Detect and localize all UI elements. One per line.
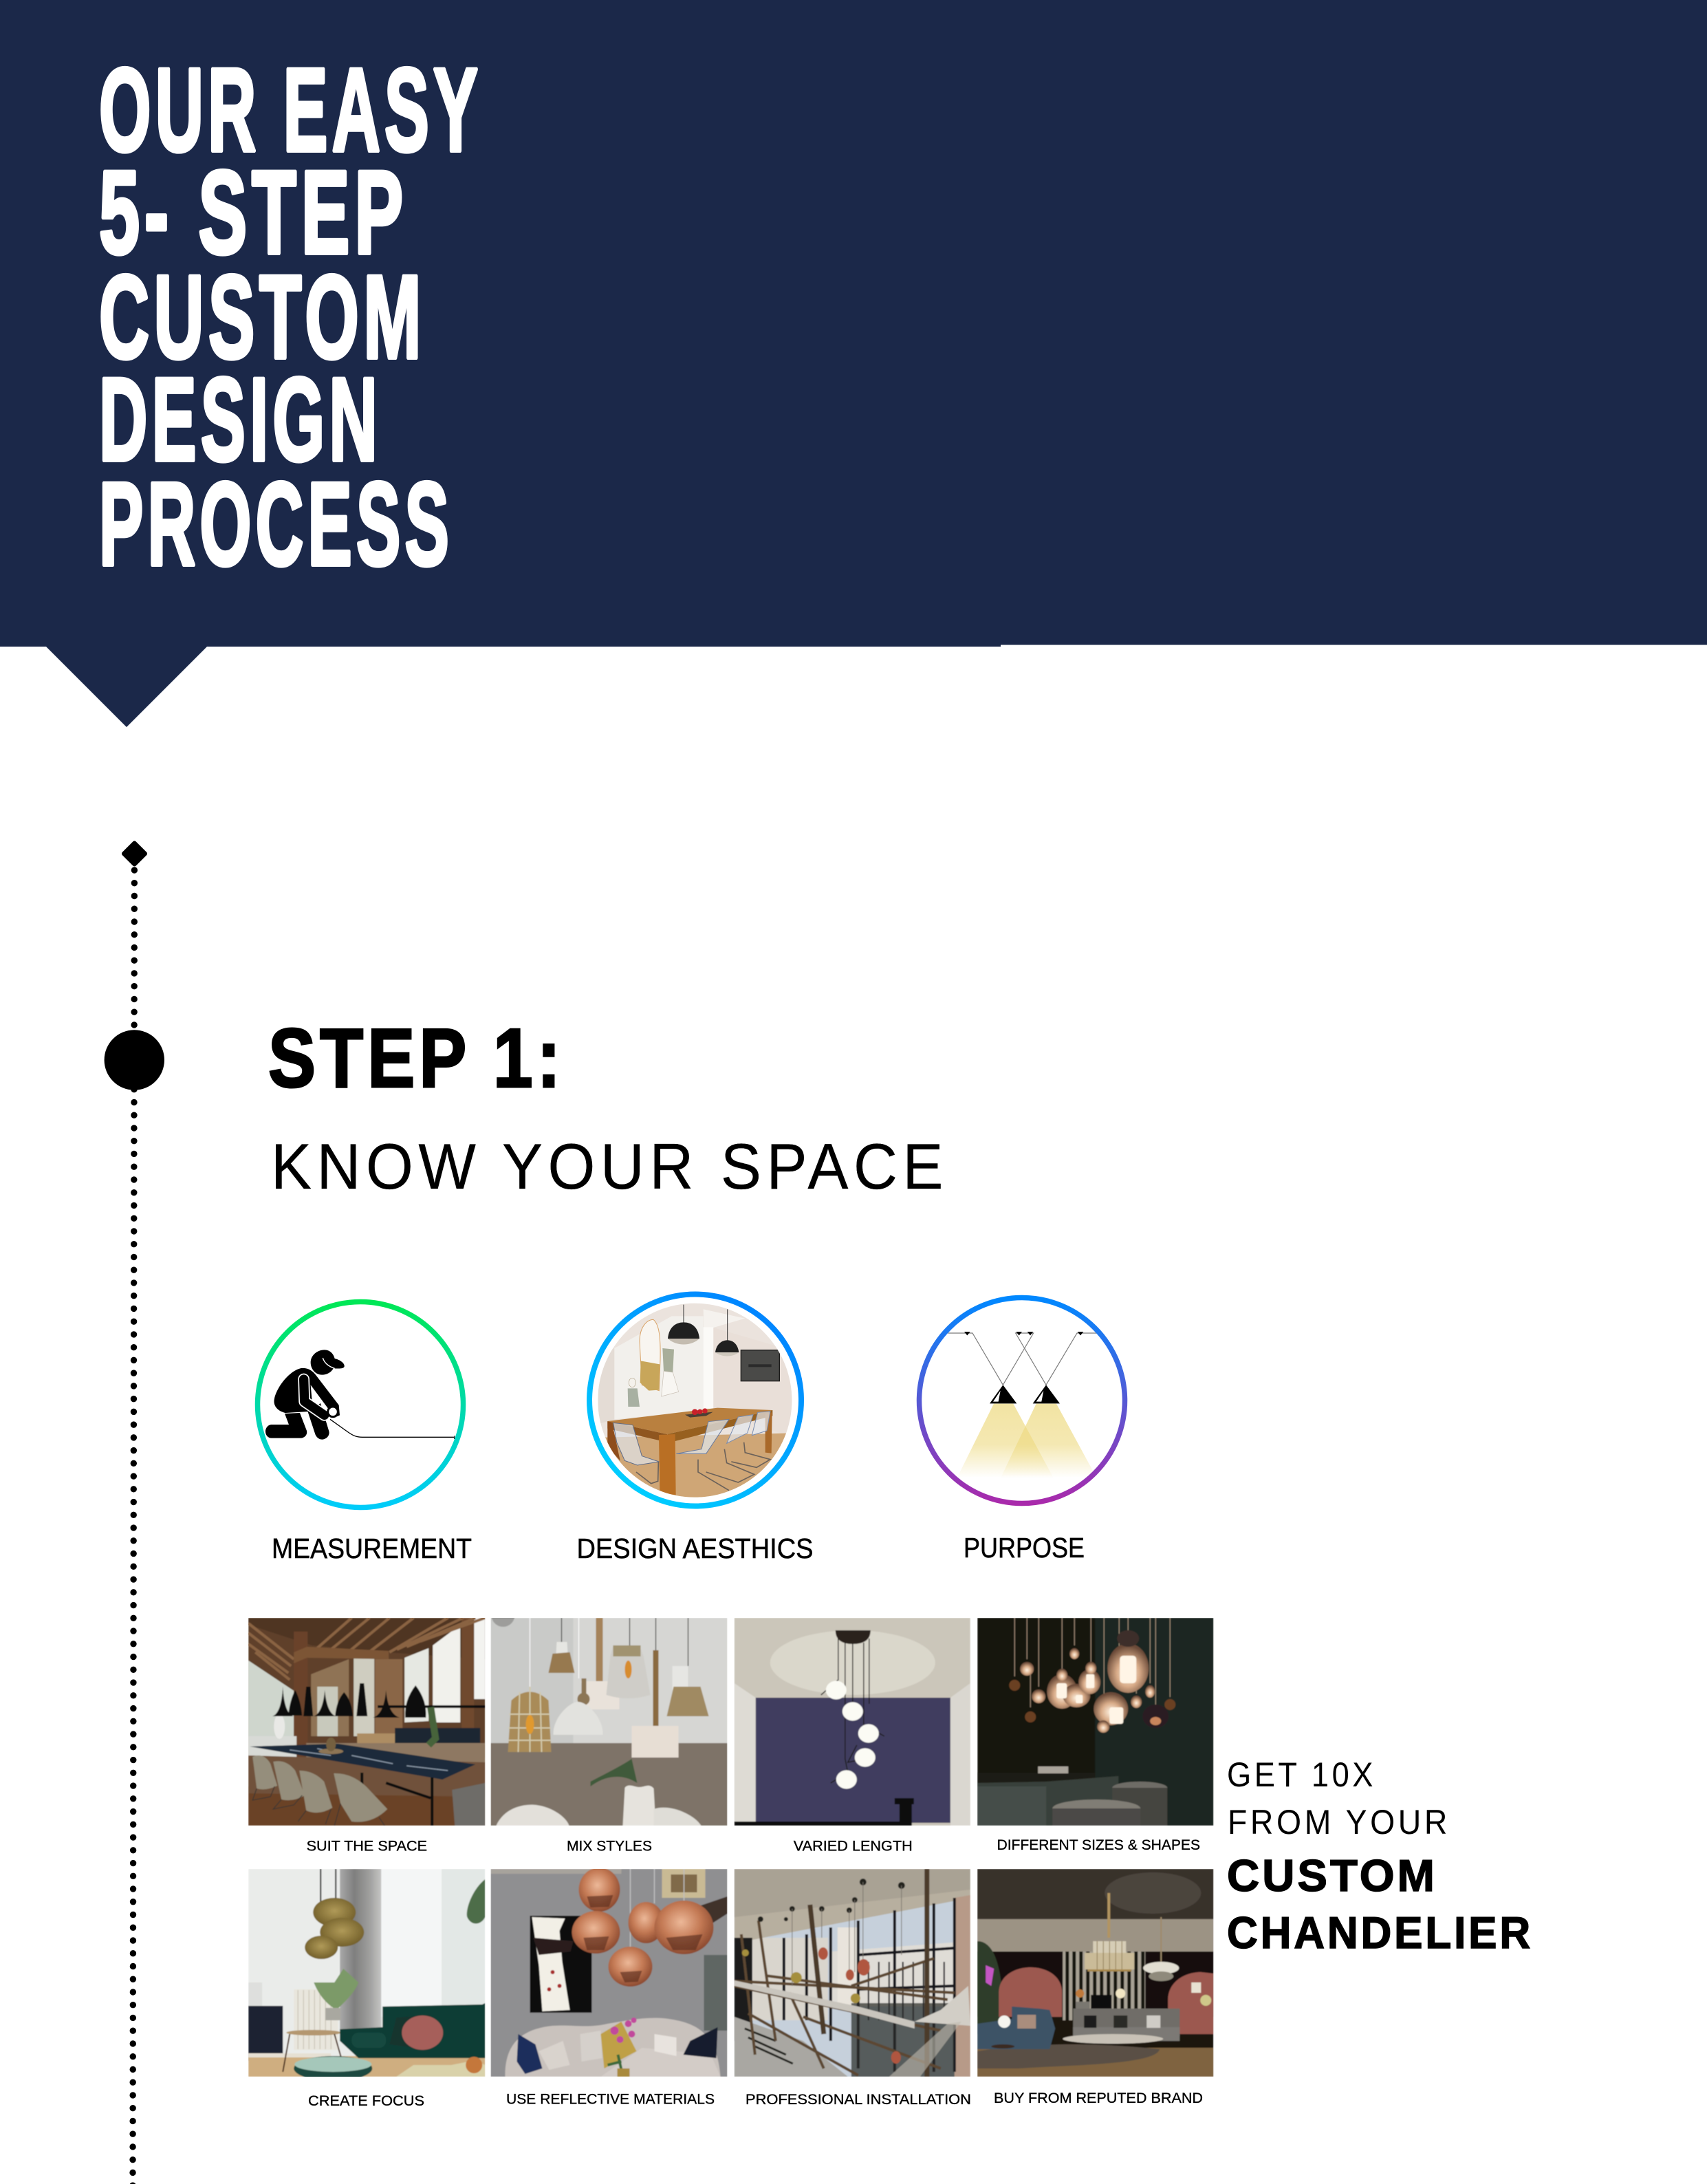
photo: different sizes and shapes: [977, 1618, 1213, 1826]
caption: different sizes and shapes: DIFFERENT SIZES & SHAPES: [997, 1837, 1200, 1853]
header pointer triangle: [46, 647, 207, 727]
caption: suit the space: SUIT THE SPACE: [307, 1838, 427, 1855]
caption: create focus: CREATE FOCUS: [308, 2093, 424, 2109]
callout: get 10x from your custom chandelier: CHANDELIER: [1227, 1907, 1533, 1958]
title: CUSTOM: [99, 251, 426, 383]
icon: measurement: [257, 1301, 464, 1508]
timeline step marker: [105, 1030, 164, 1090]
step 1 subheading: KNOW YOUR SPACE: [271, 1130, 948, 1202]
title: DESIGN: [99, 354, 382, 486]
photo: buy from reputed brand: [977, 1869, 1213, 2077]
caption: buy from reputed brand: BUY FROM REPUTED BRAND: [994, 2090, 1203, 2106]
photo: create focus: [248, 1869, 486, 2077]
photo: suit the space: [248, 1618, 486, 1826]
callout: get 10x from your custom chandelier: GET 10X: [1227, 1755, 1376, 1794]
photo: professional installation: [734, 1869, 971, 2077]
title: OUR EASY: [99, 44, 482, 176]
photo: use reflective materials: [491, 1869, 728, 2077]
callout: get 10x from your custom chandelier: [1227, 1755, 1533, 1958]
title: 5- STEP: [99, 147, 408, 279]
icon: purpose pendant lights: [919, 1297, 1125, 1504]
label: measurement: MEASUREMENT: [272, 1533, 472, 1564]
caption: varied length: VARIED LENGTH: [794, 1838, 913, 1855]
photo: varied length: [734, 1618, 971, 1826]
caption: mix styles: MIX STYLES: [567, 1838, 652, 1855]
label: purpose: PURPOSE: [964, 1532, 1085, 1564]
header band: [0, 0, 1707, 647]
icon: design aesthetics photo: [589, 1295, 801, 1506]
callout: get 10x from your custom chandelier: FROM YOUR: [1228, 1803, 1450, 1841]
label: design aesthetics: DESIGN AESTHICS: [576, 1533, 813, 1564]
title: [99, 44, 482, 590]
step 1 heading: STEP 1:: [268, 1011, 565, 1105]
timeline dotted line: [133, 870, 134, 2184]
title: PROCESS: [99, 458, 453, 590]
timeline start diamond: [121, 840, 148, 867]
callout: get 10x from your custom chandelier: CUSTOM: [1227, 1850, 1437, 1901]
caption: use reflective materials: USE REFLECTIVE MATERIALS: [506, 2091, 715, 2108]
photo: mix styles: [491, 1618, 728, 1826]
caption: professional installation: PROFESSIONAL INSTALLATION: [746, 2091, 971, 2108]
